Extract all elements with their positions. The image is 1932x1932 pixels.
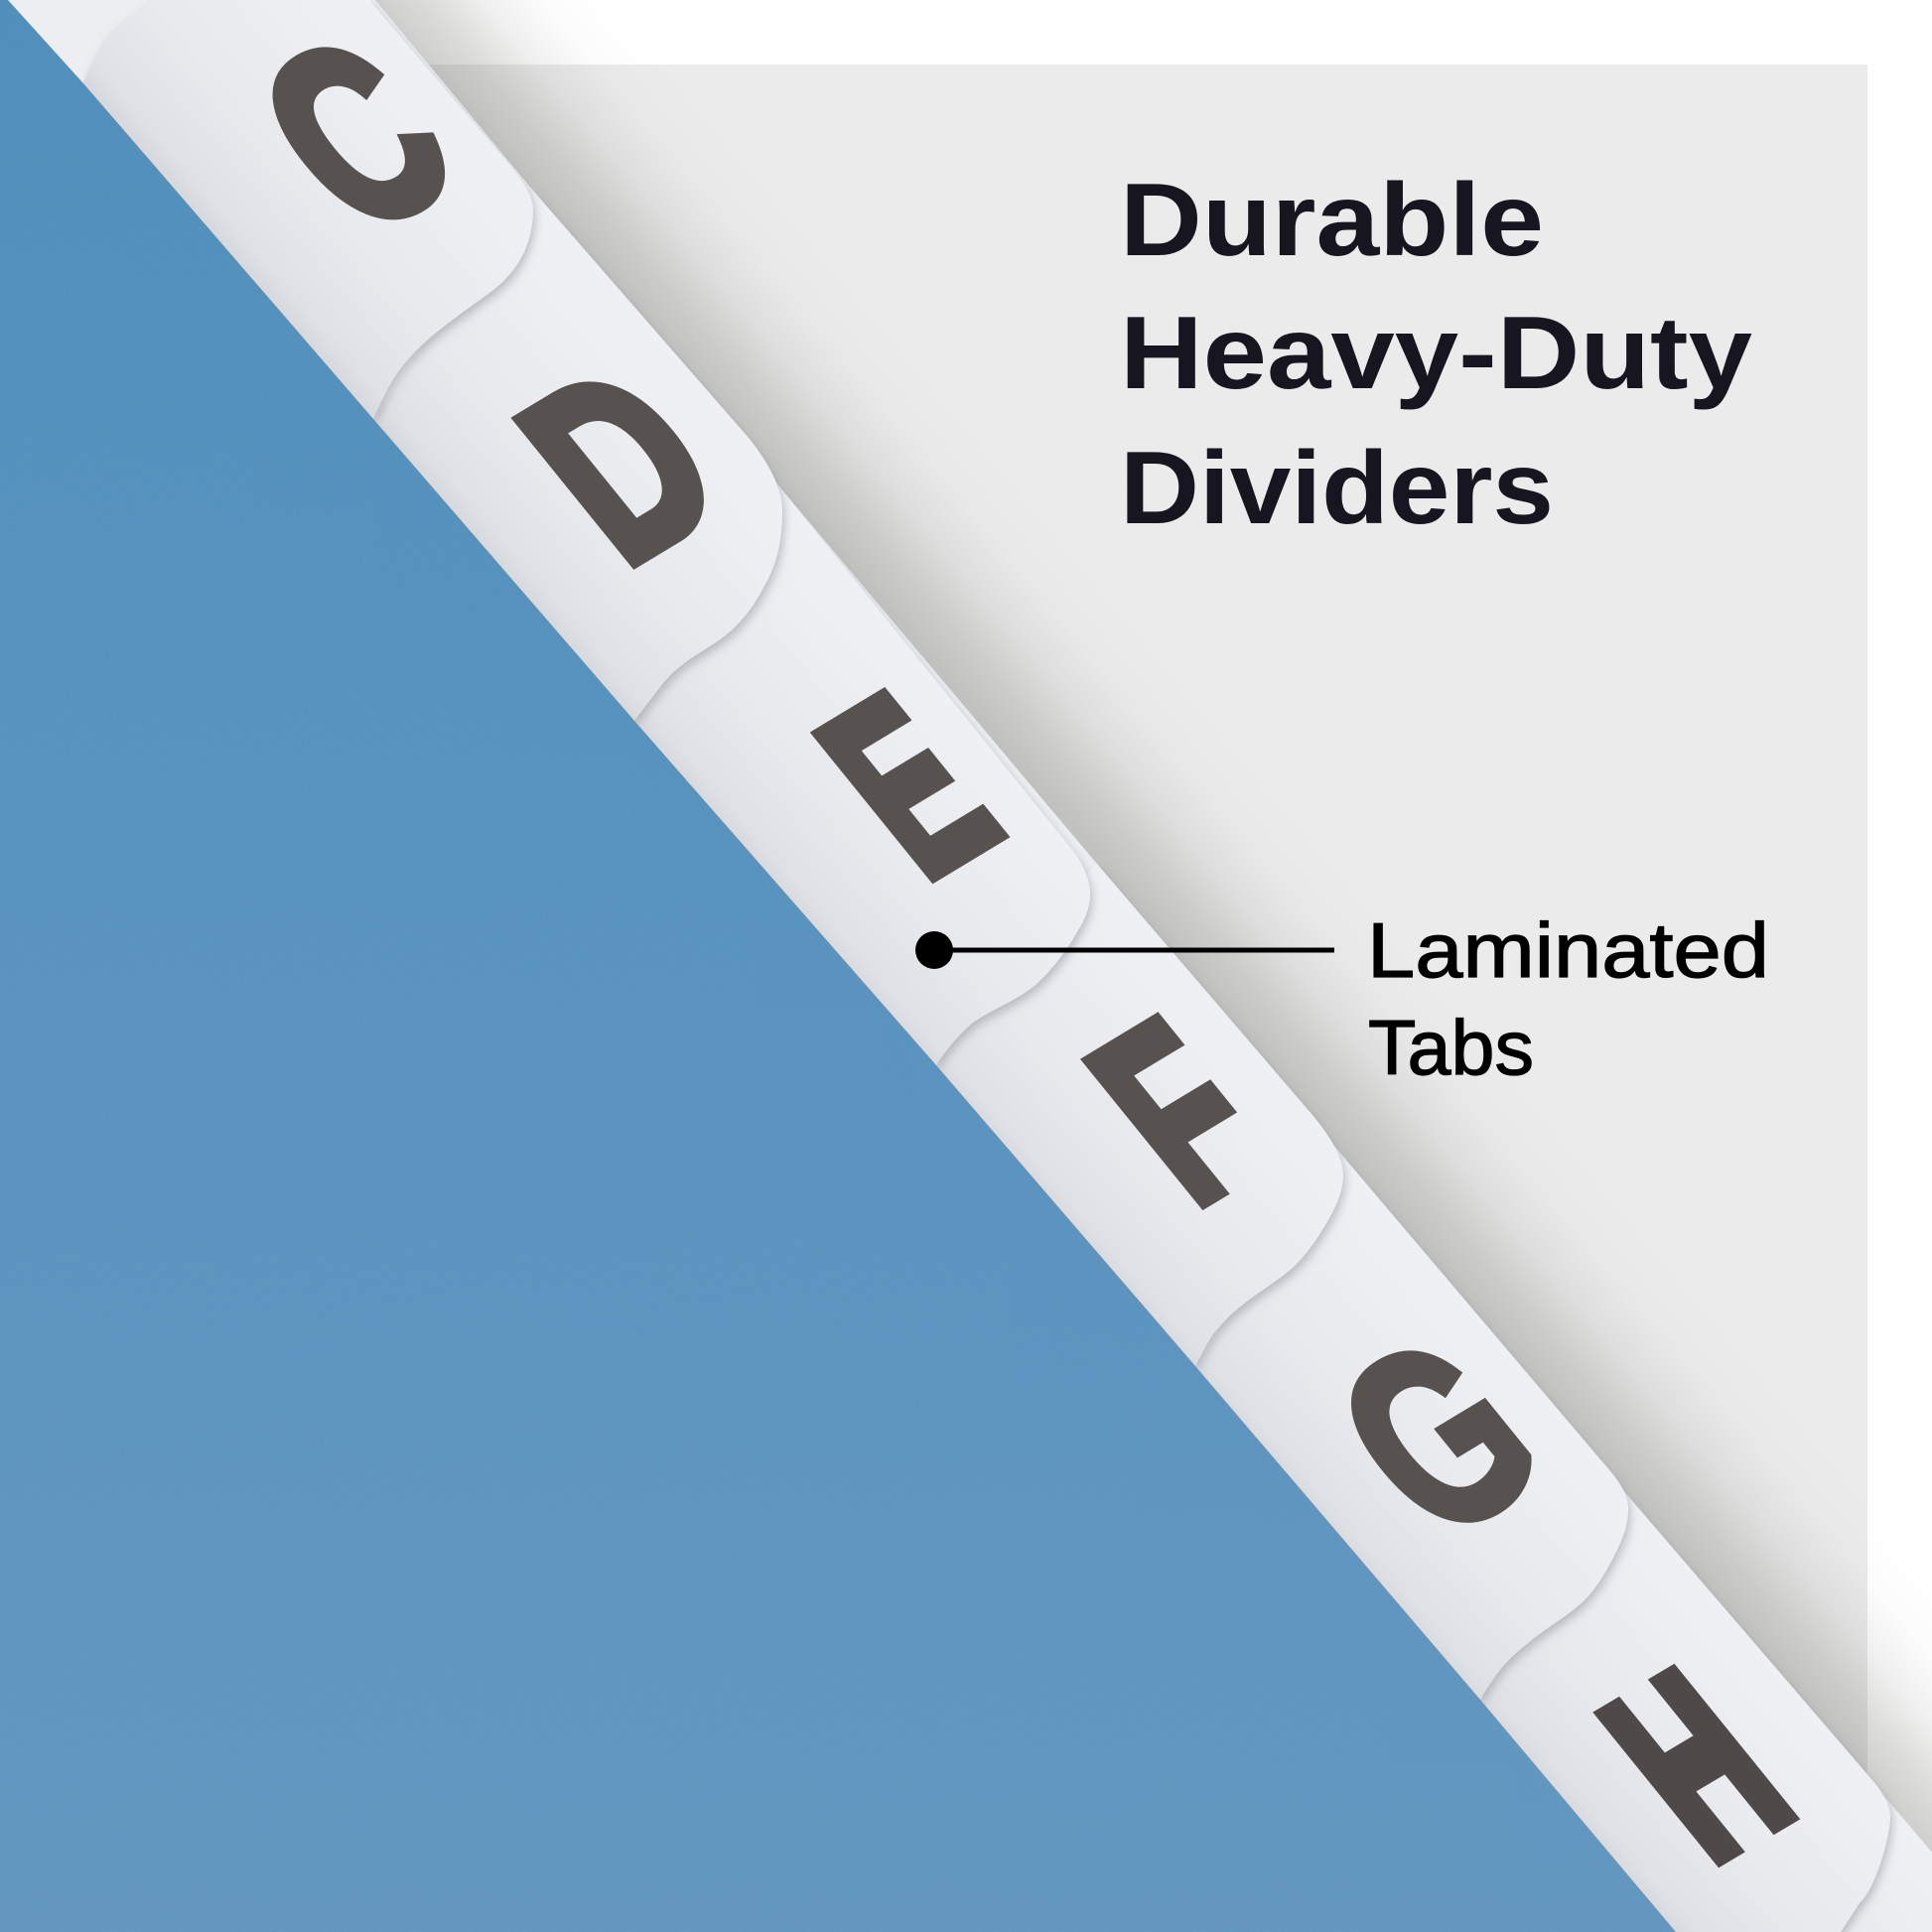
callout: laminated tabs [915,906,1769,1091]
tab: G [1195,1157,1628,1700]
callout label: Laminated [1367,906,1769,994]
letter G: G [1286,1287,1590,1587]
callout dot [915,931,953,969]
letter F: F [1042,972,1313,1253]
callout label [1367,906,1769,1091]
title: Durable [1120,163,1544,278]
callout label: Tabs [1368,1004,1534,1091]
tab: I [1841,1807,1932,1932]
title [1120,163,1752,546]
letter D: D [474,316,769,613]
title: Dividers [1120,431,1554,546]
tab: E [634,486,1090,1065]
title: Heavy-Duty [1120,296,1752,411]
tab: H [1480,1496,1890,1932]
letter E: E [772,645,1043,925]
tab: D [373,191,782,721]
panel: light gray backdrop [298,65,1867,1932]
letter H: H [1560,1625,1834,1907]
tab: F [936,863,1343,1366]
callout leader line [934,947,1334,953]
tab: C [83,0,533,419]
